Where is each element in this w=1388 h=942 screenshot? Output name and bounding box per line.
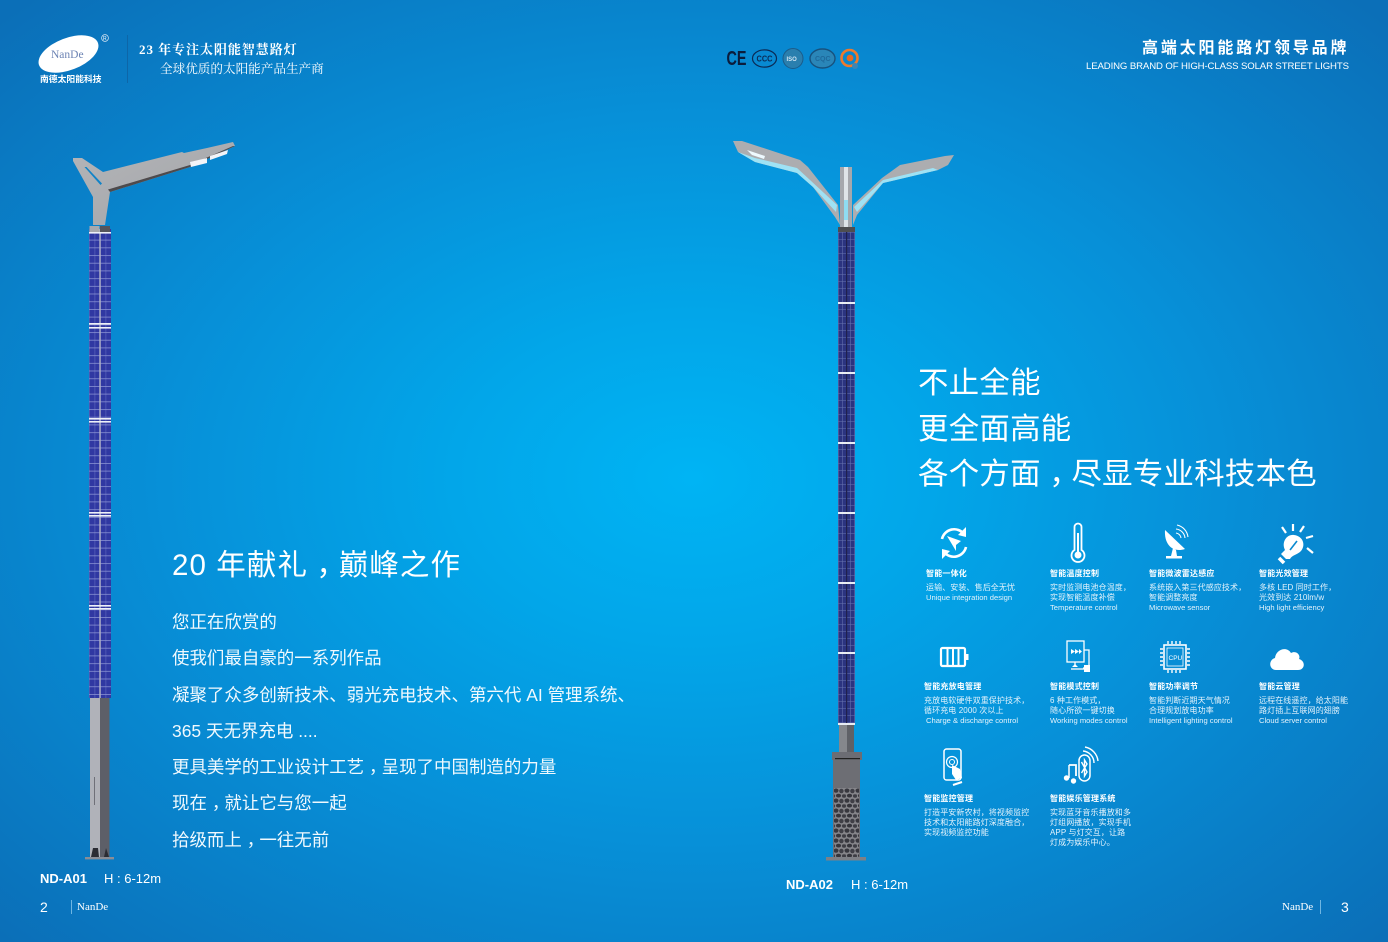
feature text: 智能监控管理: [924, 794, 973, 803]
body text: 拾级而上 ，一往无前: [172, 830, 329, 850]
feature text: 实时监测电池仓温度，: [1050, 583, 1131, 592]
feature text: 合理规划放电功率: [1149, 706, 1214, 715]
panel: right heading: 更全面高能: [918, 412, 1071, 446]
feature: light efficiency: [1259, 524, 1336, 612]
feature text: 智能模式控制: [1050, 682, 1099, 691]
body text: 365 天无界充电 ....: [172, 721, 318, 741]
model label: ND-A01: ND-A01: [40, 871, 87, 886]
icon: NanDe logo: [38, 34, 109, 73]
feature text: Temperature control: [1050, 603, 1118, 612]
feature text: [924, 682, 1029, 725]
icon: NanDe logo: R: [103, 36, 107, 42]
body text: 现在 ，就让它与您一起: [172, 793, 347, 813]
feature text: 智能一体化: [926, 569, 967, 578]
icon: thermometer: [1070, 522, 1086, 563]
footer left: page 2: 2: [40, 899, 48, 915]
slogan line one: 23 年专注太阳能智慧路灯: [139, 42, 298, 57]
model label: ND-A02: ND-A02: [786, 877, 833, 892]
feature text: 循环充电 2000 次以上: [924, 706, 1004, 715]
header divider: [127, 35, 128, 83]
footer right: page 3: [1282, 898, 1350, 916]
brand slogan chinese: 高端太阳能路灯领导品牌: [1142, 40, 1349, 57]
feature text: 智能充放电管理: [924, 682, 981, 691]
feature text: 路灯插上互联网的翅膀: [1259, 706, 1340, 715]
icon: NanDe logo: NanDe: [51, 49, 84, 61]
feature text: Unique integration design: [926, 593, 1012, 602]
feature text: 随心所欲一键切换: [1050, 706, 1115, 715]
feature text: 打造平安新农村，将视频监控: [924, 808, 1029, 817]
certification icons: [726, 48, 859, 70]
icon: CPU chip: [1160, 641, 1190, 673]
feature text: 远程在线遥控，给太阳能: [1259, 696, 1348, 705]
feature text: 运输、安装、售后全无忧: [926, 583, 1015, 592]
feature text: 智能调整亮度: [1149, 593, 1198, 602]
feature text: 系统嵌入第三代感应技术，: [1149, 583, 1246, 592]
panel: left copy: [172, 549, 635, 850]
feature text: [1050, 792, 1131, 848]
body text: 使我们最自豪的一系列作品: [172, 648, 382, 668]
brand slogan english: LEADING BRAND OF HIGH-CLASS SOLAR STREET LIGHTS: [1086, 61, 1349, 72]
heading: 20 years tribute: 20 年献礼 ，巅峰之作: [172, 549, 461, 582]
feature text: [926, 569, 1015, 602]
twin lamp heads: [733, 141, 954, 227]
feature text: 灯成为娱乐中心。: [1050, 838, 1115, 847]
feature text: 技术和太阳能路灯深度融合，: [924, 818, 1029, 827]
feature text: High light efficiency: [1259, 603, 1324, 612]
feature text: 智能光效管理: [1259, 569, 1308, 578]
pole base: [85, 698, 114, 859]
panel: right heading: 各个方面 ，尽显专业科技本色: [918, 457, 1317, 491]
feature: video monitoring: [924, 748, 1029, 837]
feature text: [1149, 568, 1246, 612]
icon: mode switch: [1066, 640, 1090, 672]
certification icons: ISO: [786, 57, 797, 63]
feature text: Intelligent lighting control: [1149, 716, 1233, 725]
icon: battery: [940, 646, 968, 668]
feature text: 智能云管理: [1259, 682, 1300, 691]
slogan line two: 全球优质的太阳能产品生产商: [160, 62, 324, 76]
lamp head: [73, 142, 235, 225]
panel: right heading: 不止全能: [918, 366, 1041, 400]
body text: 凝聚了众多创新技术、弱光充电技术、第六代 AI 管理系统、: [172, 685, 635, 705]
feature: microwave sensor: [1149, 524, 1246, 612]
icon: radar dish: [1164, 524, 1188, 558]
model label: ND-A02: [786, 876, 908, 894]
feature: integration: [926, 527, 1015, 602]
solar panel column: [89, 226, 111, 698]
certification icons: CCC: [756, 54, 773, 64]
feature text: Microwave sensor: [1149, 603, 1210, 612]
feature text: 智能判断近期天气情况: [1149, 696, 1230, 705]
body text: 更具美学的工业设计工艺 ，呈现了中国制造的力量: [172, 757, 556, 777]
feature text: 充放电软硬件双重保护技术，: [924, 696, 1029, 705]
logo caption: 南德太阳能科技: [40, 74, 102, 84]
feature: power adjustment: [1149, 641, 1233, 725]
feature text: 实现蓝牙音乐播放和多: [1050, 808, 1131, 817]
feature text: 实现智能温度补偿: [1050, 593, 1115, 602]
footer right: page 3: NanDe: [1282, 901, 1313, 913]
footer left: page 2: [40, 898, 112, 916]
icon: phone monitor: [943, 748, 962, 786]
feature text: Charge & discharge control: [926, 716, 1018, 725]
icon: rotating arrows: [940, 527, 968, 559]
panel: right heading: [918, 366, 1317, 491]
feature text: [1050, 682, 1128, 725]
certification icons: CQC: [815, 56, 831, 63]
product illustration: ND-A02 pole: [733, 141, 954, 860]
panel: feature grid: [924, 522, 1348, 847]
feature text: 智能功率调节: [1149, 682, 1198, 691]
feature text: [1259, 682, 1348, 725]
feature: entertainment: [1050, 746, 1131, 847]
feature text: 6 种工作模式，: [1050, 696, 1105, 705]
icon: bluetooth music: [1064, 746, 1099, 784]
panel: left page header: [38, 34, 324, 84]
feature text: [1050, 568, 1131, 612]
product illustration: ND-A01 pole: [73, 142, 235, 860]
feature text: [1259, 568, 1336, 612]
body text: [172, 612, 635, 850]
footer left: page 2: NanDe: [77, 901, 108, 913]
model label: ND-A01: [40, 870, 162, 888]
feature text: 实现视频监控功能: [924, 828, 989, 837]
feature text: Working modes control: [1050, 716, 1128, 725]
model label: ND-A01: H : 6-12m: [104, 871, 161, 886]
feature text: APP 与灯交互，让路: [1050, 828, 1125, 837]
icon: cloud: [1270, 649, 1304, 670]
icon: CPU chip: CPU: [1168, 655, 1183, 662]
feature text: [924, 794, 1029, 837]
solar panel column: [838, 227, 855, 725]
body text: 您正在欣赏的: [172, 612, 277, 632]
feature: temperature: [1050, 522, 1131, 612]
footer right: page 3: 3: [1341, 899, 1349, 915]
stone pattern base: [826, 725, 866, 860]
feature text: Cloud server control: [1259, 716, 1327, 725]
feature text: 智能微波雷达感应: [1149, 569, 1215, 578]
feature text: 智能娱乐管理系统: [1050, 794, 1116, 803]
feature text: 灯组网播放，实现手机: [1050, 818, 1131, 827]
feature text: 多核 LED 同时工作，: [1259, 583, 1336, 592]
feature text: 光效到达 210lm/w: [1259, 593, 1324, 602]
feature: charge control: [924, 646, 1029, 725]
model label: ND-A02: H : 6-12m: [851, 877, 908, 892]
feature text: [1149, 682, 1233, 725]
feature: working modes: [1050, 640, 1128, 725]
icon: light bulb: [1278, 524, 1314, 564]
feature text: 智能温度控制: [1050, 569, 1099, 578]
header right: brand slogan: [1086, 39, 1349, 72]
certification icons: CE: [726, 48, 746, 70]
feature: cloud control: [1259, 649, 1348, 725]
